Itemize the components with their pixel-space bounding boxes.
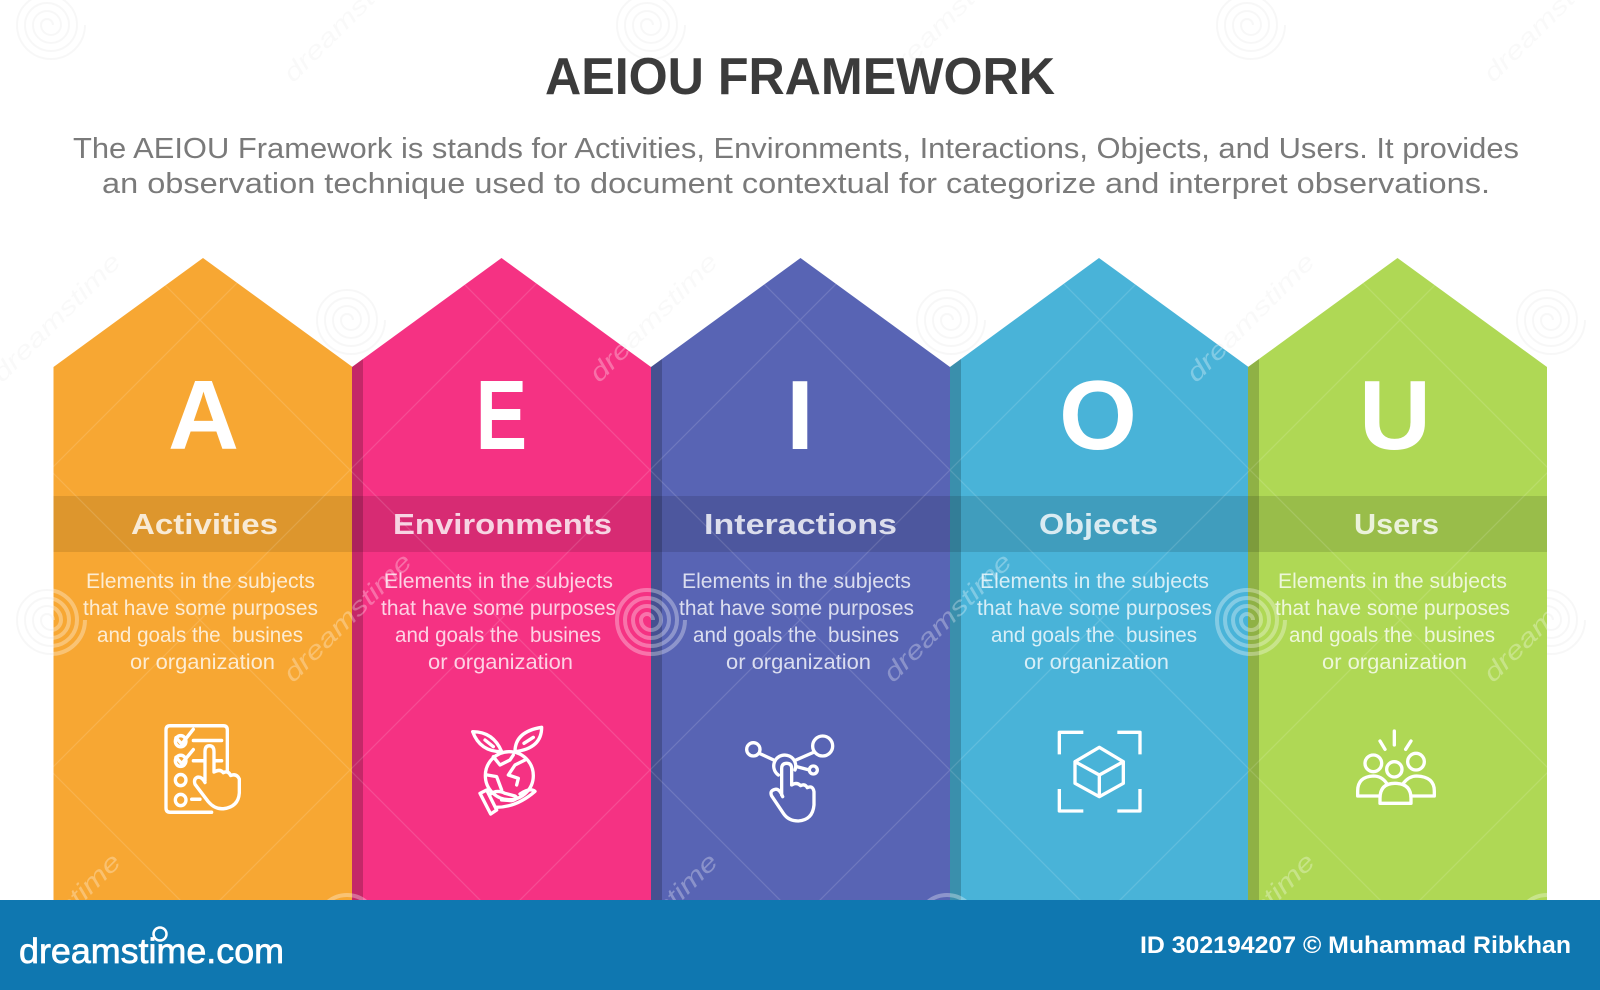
watermark: lattice lines and marks over panels: dreamstime [878, 548, 1018, 688]
watermark: faint marks on white background [0, 0, 1600, 654]
description: and goals the busines [991, 624, 1197, 647]
description: and goals the busines [395, 624, 601, 647]
icon: checklist with pointing hand [166, 726, 239, 812]
panel shadow strip [1248, 359, 1259, 900]
description: Elements in the subjects [384, 570, 613, 593]
subtitle: The AEIOU Framework is stands for Activities, Environments, Interactions, Objects, and Users. It provides [73, 133, 1519, 165]
icon: group of users [1358, 731, 1434, 803]
watermark: faint marks on white background: dreamstime [1181, 248, 1321, 388]
heading: Objects: Objects [1039, 509, 1158, 541]
description: or organization [1322, 651, 1467, 674]
panel: I Interactions [651, 258, 950, 900]
description: or organization [428, 651, 573, 674]
letter U: U [1359, 360, 1431, 470]
description [977, 570, 1212, 674]
panel: U Users [1248, 258, 1547, 900]
description: that have some purposes [381, 597, 616, 620]
description: Elements in the subjects [86, 570, 315, 593]
watermark: lattice lines and marks over panels: dreamstime [1181, 848, 1321, 988]
panel shadow strip [352, 359, 363, 900]
letter I: I [786, 360, 814, 470]
description: or organization [130, 651, 275, 674]
watermark: lattice lines and marks over panels: dreamstime [278, 548, 418, 688]
icon: globe with leaves held in hand [473, 727, 542, 814]
watermark: lattice lines and marks over panels: dreamstime [1478, 548, 1600, 688]
description [83, 570, 318, 674]
icon: cube in scan frame [1059, 732, 1140, 811]
heading: Interactions: Interactions [704, 509, 897, 541]
panel: O Objects [950, 258, 1248, 900]
description: that have some purposes [83, 597, 318, 620]
panel shadow strip [950, 359, 961, 900]
description: that have some purposes [1275, 597, 1510, 620]
watermark: lattice lines and marks over panels: dreamstime [584, 248, 724, 388]
description: Elements in the subjects [682, 570, 911, 593]
description: Elements in the subjects [980, 570, 1209, 593]
watermark: lattice lines and marks over panels: dreamstime [584, 848, 724, 988]
description: that have some purposes [977, 597, 1212, 620]
panel shadow strip [651, 359, 662, 900]
panel: A Activities [54, 258, 352, 900]
description: Elements in the subjects [1278, 570, 1507, 593]
description: or organization [1024, 651, 1169, 674]
description [381, 570, 616, 674]
description: that have some purposes [679, 597, 914, 620]
subtitle: an observation technique used to document contextual for categorize and interpret observations. [102, 168, 1490, 200]
description: and goals the busines [97, 624, 303, 647]
description: and goals the busines [1289, 624, 1495, 647]
heading: Users: Users [1354, 509, 1439, 541]
subtitle [73, 133, 1519, 200]
letter E: E [476, 360, 527, 470]
footer logo: dreamstime.com [19, 932, 284, 971]
letter O: O [1059, 360, 1137, 470]
heading: Activities: Activities [131, 509, 278, 541]
title: AEIOU FRAMEWORK [545, 48, 1055, 106]
footer credit: ID 302194207 © Muhammad Ribkhan [1140, 932, 1571, 959]
heading: Environments: Environments [393, 509, 612, 541]
description: or organization [726, 651, 871, 674]
watermark: lattice lines and marks over panels: dreamstime [1181, 248, 1321, 388]
letter A: A [168, 360, 239, 470]
watermark: faint marks on white background: dreamstime [584, 248, 724, 388]
description: and goals the busines [693, 624, 899, 647]
icon: hand tapping connected nodes [747, 736, 833, 821]
watermark: lattice lines and marks over panels [54, 282, 1547, 900]
description [1275, 570, 1510, 674]
description [679, 570, 914, 674]
footer bar [0, 900, 1600, 990]
panel: E Environments [352, 258, 651, 900]
